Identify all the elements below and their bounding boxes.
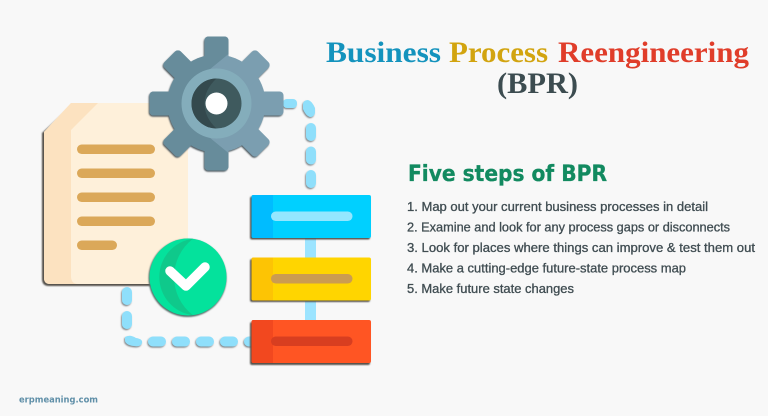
gear centre hole — [206, 92, 228, 114]
list: five steps — [407, 200, 756, 296]
gear shaded side — [150, 36, 228, 170]
list: five steps: 1. Map out your current business processes in detail — [407, 200, 708, 214]
document text lines — [77, 144, 155, 250]
connector: dashed line from flowchart to document — [122, 287, 256, 346]
heading: Five steps of BPR: Five steps of BPR — [408, 162, 607, 187]
gear ring — [182, 68, 252, 138]
icon: green check badge — [148, 238, 226, 317]
title — [326, 36, 749, 100]
title: Reengineering — [558, 36, 749, 69]
flowchart connectors — [305, 238, 316, 321]
title: Business — [326, 36, 441, 69]
flowchart box: red — [250, 320, 371, 365]
list: five steps: 3. Look for places where things can improve & test them out — [407, 241, 756, 255]
icon: gear — [149, 36, 284, 172]
illustration: document page — [42, 103, 188, 286]
list: five steps: 2. Examine and look for any process gaps or disconnects — [407, 220, 730, 234]
list: five steps: 5. Make future state changes — [407, 282, 574, 296]
gear hub — [192, 78, 242, 128]
flowchart box: yellow — [250, 258, 371, 302]
title second line: (BPR) — [497, 67, 578, 100]
flowchart — [250, 195, 371, 365]
footer: site name: erpmeaning.com — [19, 396, 98, 406]
flowchart box: blue — [250, 195, 371, 240]
list: five steps: 4. Make a cutting-edge future-state process map — [407, 262, 686, 276]
title: Process — [449, 36, 548, 69]
connector: dashed line from gear to flowchart — [283, 99, 316, 188]
